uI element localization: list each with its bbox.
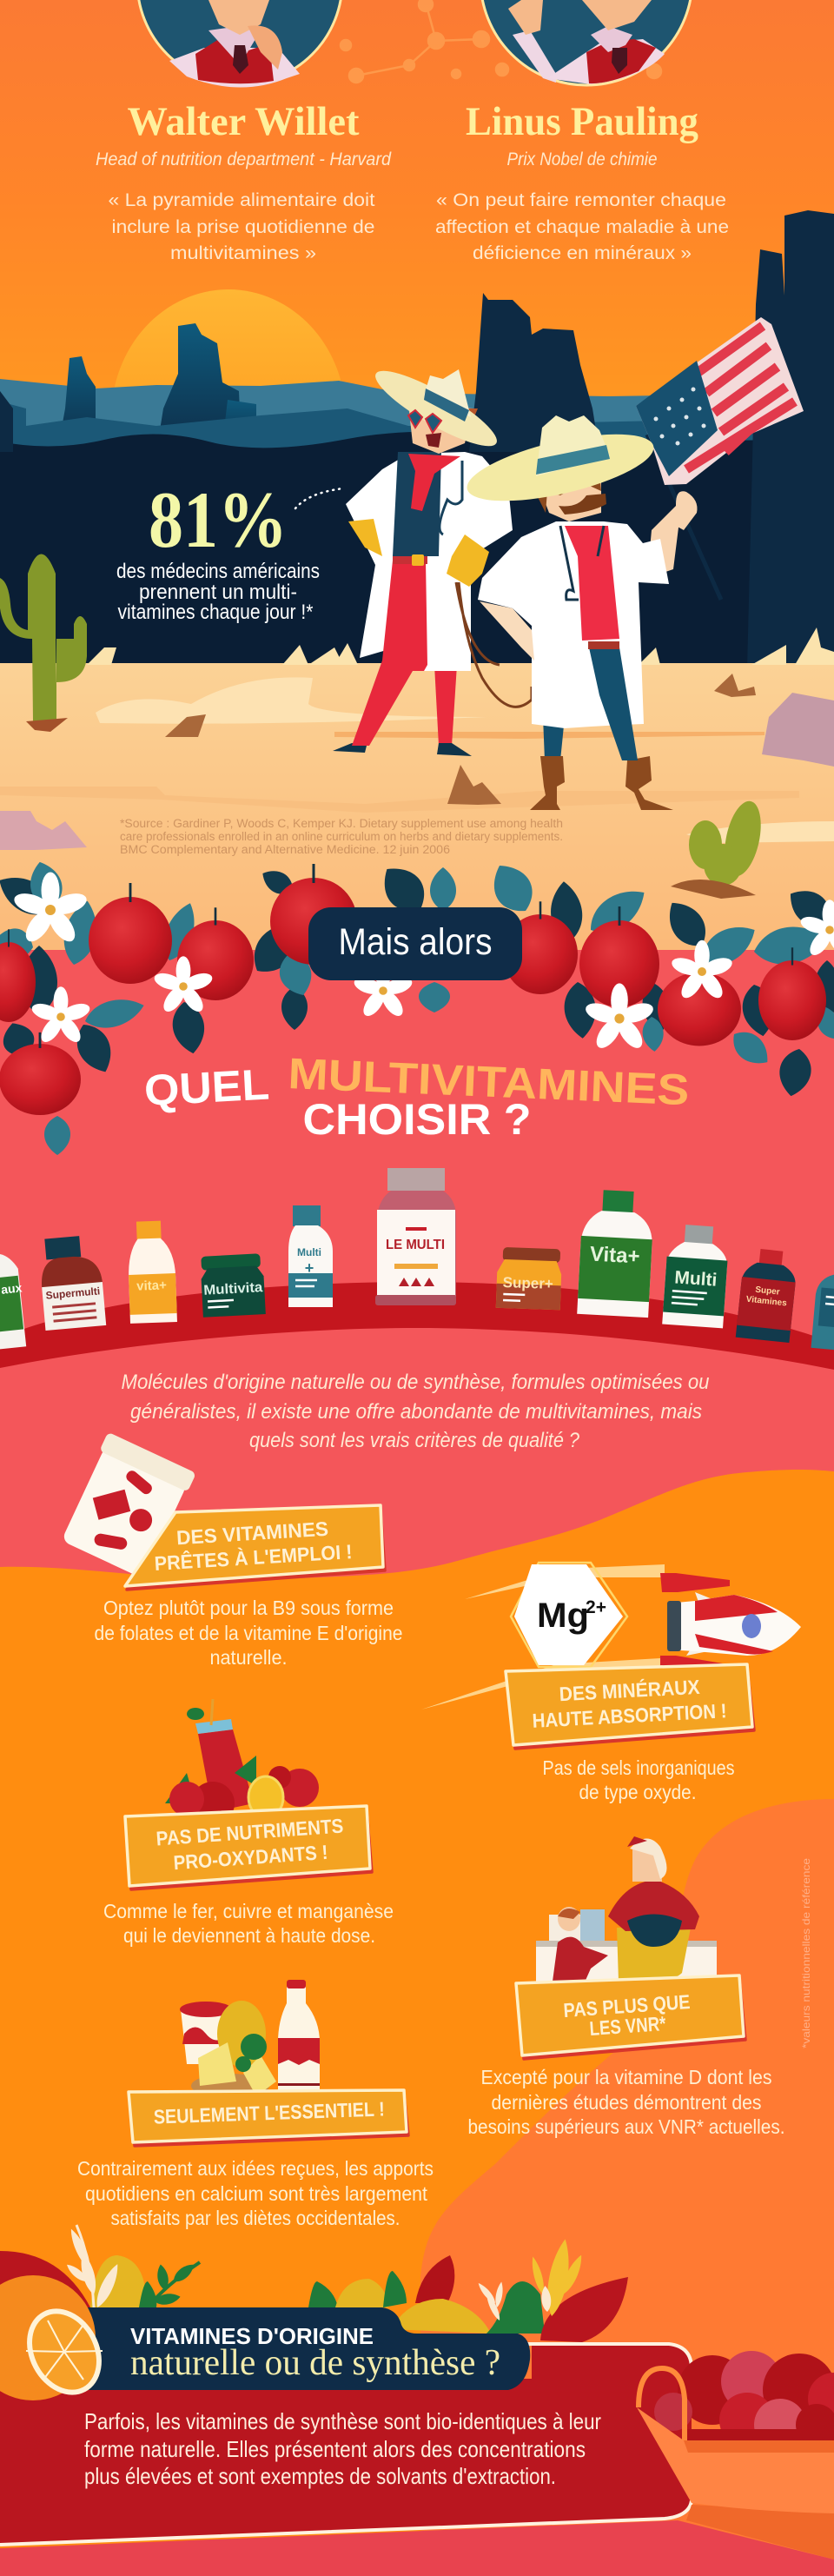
source note: *Source : Gardiner P, Woods C, Kemper KJ. Dietary supplement use among health: [120, 817, 563, 830]
icon: Mg hexagon: [511, 1563, 627, 1667]
criterion 3: no pro-oxidants: [103, 1699, 394, 1947]
bottle: Multi+: +: [305, 1259, 314, 1277]
scenery: grass tufts: [87, 627, 834, 665]
apples: [0, 864, 826, 1115]
bottle: vita+ yellow: vita+: [136, 1278, 167, 1294]
shelf: [0, 1282, 834, 1370]
quote: affection et chaque maladie à une: [435, 217, 729, 237]
text: [467, 2066, 785, 2138]
text: dernières études démontrent des: [492, 2091, 761, 2114]
intro text: généralistes, il existe une offre abondante de multivitamines, mais: [130, 1400, 702, 1424]
title: Quel multivitamines choisir: CHOISIR ?: [302, 1095, 532, 1144]
criterion 2: high-absorption minerals: [421, 1563, 801, 1803]
icon: cactus left: [0, 554, 87, 732]
pill: Mais alors: [308, 907, 522, 980]
card: [506, 1664, 754, 1749]
heading: Linus Pauling: Linus Pauling: [466, 99, 698, 144]
text: Pas de sels inorganiques: [542, 1756, 735, 1779]
card: DES MINÉRAUX: [559, 1675, 701, 1705]
bottle: Multivita: Multivita: [203, 1280, 263, 1298]
leaves: [0, 858, 834, 1099]
icon: heart sunglasses: [408, 410, 441, 433]
text: Comme le fer, cuivre et manganèse: [103, 1900, 394, 1922]
bottle: Multi: Multi: [674, 1267, 718, 1291]
panel body text: plus élevées et sont exemptes de solvants d'extraction.: [84, 2463, 556, 2489]
criterion 4: no more than NRVs: [467, 1836, 785, 2138]
text: de type oxyde.: [579, 1781, 697, 1803]
title: Quel multivitamines choisir: QUEL: [143, 1060, 270, 1115]
panel: natural or synthetic: [0, 2344, 692, 2545]
bottle: LE MULTI: LE MULTI: [386, 1238, 445, 1252]
text: [103, 1900, 394, 1947]
intro text: Molécules d'origine naturelle ou de synthèse, formules optimisées ou: [122, 1371, 709, 1394]
card: HAUTE ABSORPTION !: [532, 1699, 727, 1732]
card: [125, 1505, 385, 1590]
stat description: vitamines chaque jour !*: [118, 601, 313, 624]
bottle: right cut: [811, 1272, 834, 1351]
source note: care professionals enrolled in an online curriculum on herbs and dietary supplements.: [120, 830, 563, 843]
icon: dairy products: [180, 1980, 320, 2098]
icon: rocket: [660, 1573, 801, 1670]
flowers: [11, 873, 834, 1052]
background: coral section: [0, 950, 834, 1651]
scenery: desert ground: [0, 663, 834, 959]
bottle: Super+: [496, 1247, 562, 1310]
bottle: Multi+: [288, 1205, 333, 1307]
illustration: American flag: [636, 317, 804, 600]
heading: Linus Pauling: [435, 99, 729, 263]
banner: heading: VITAMINES D'ORIGINE: [130, 2323, 374, 2349]
text: Excepté pour la vitamine D dont les: [481, 2066, 771, 2088]
icon: apple basket: [637, 2351, 834, 2513]
scenery: blue rocks: [57, 323, 256, 452]
portrait: Walter Willet: [137, 0, 342, 88]
icon: capsule jar: [58, 1432, 196, 1580]
role: Prix Nobel de chimie: [507, 149, 657, 169]
criterion 1: ready-to-use vitamins: [58, 1432, 402, 1669]
bottle: vita+ yellow: [127, 1220, 177, 1324]
decoration: molecule: [341, 0, 661, 83]
bottle: LE MULTI: [375, 1168, 456, 1305]
panel body text: Parfois, les vitamines de synthèse sont bio-identiques à leur: [84, 2408, 601, 2434]
title: Quel multivitamines choisir: [143, 1049, 690, 1144]
card: PRÊTES À L'EMPLOI !: [154, 1539, 353, 1575]
bottle: Supermulti: Supermulti: [45, 1285, 101, 1302]
card: PAS DE NUTRIMENTS: [156, 1815, 344, 1850]
card: [129, 2090, 408, 2146]
icon: orange: [0, 2275, 116, 2408]
intro text: quels sont les vrais critères de qualité ?: [249, 1429, 580, 1452]
text: [77, 2157, 434, 2229]
bottle: Super+: Super+: [502, 1274, 553, 1292]
quote: « La pyramide alimentaire doit: [108, 190, 375, 210]
illustration: doctor cowboy right: [461, 415, 697, 810]
stat description: des médecins américains: [116, 560, 320, 583]
text: [94, 1597, 403, 1669]
stat description: prennent un multi-: [139, 581, 297, 604]
heading: Walter Willet: [96, 99, 392, 263]
product bottles: [0, 1168, 834, 1351]
text: Contrairement aux idées reçues, les apports: [77, 2157, 434, 2180]
card: SEULEMENT L'ESSENTIEL !: [153, 2097, 385, 2128]
quote: « On peut faire remonter chaque: [436, 190, 726, 210]
apple branches: [0, 857, 834, 1155]
bottle: aux: aux: [0, 1280, 23, 1297]
sun: [111, 289, 346, 417]
source note: BMC Complementary and Alternative Medicine. 12 juin 2006: [120, 843, 450, 856]
portrait: Linus Pauling: [480, 0, 692, 85]
panel body text: forme naturelle. Elles présentent alors des concentrations: [84, 2436, 586, 2462]
card: [125, 1806, 372, 1889]
stat description: [116, 560, 320, 624]
bottle: Vita+: [577, 1189, 655, 1318]
icon: speed trails: [421, 1564, 665, 1710]
bottle: Super Vitamines: [736, 1247, 798, 1343]
title: Quel multivitamines choisir: MULTIVITAMINES: [288, 1049, 690, 1114]
quote: [108, 190, 375, 263]
bottle: aux: [0, 1251, 29, 1351]
bottle: Multi: [662, 1224, 730, 1328]
text: satisfaits par les diètes occidentales.: [111, 2207, 400, 2229]
card: DES VITAMINES: [175, 1517, 329, 1549]
illustration: doctor cowboy left: [333, 360, 532, 756]
text: Optez plutôt pour la B9 sous forme: [103, 1597, 394, 1619]
bottle: Super Vitamines: Super: [755, 1285, 780, 1298]
icon: rock right: [762, 693, 834, 767]
card: PAS PLUS QUE: [563, 1990, 691, 2022]
icon: rock left: [0, 811, 87, 850]
bottom band: [0, 2520, 834, 2576]
source note: [120, 817, 563, 856]
footnote: vertical text: *valeurs nutritionnelles de référence: [800, 1858, 812, 2048]
quote: [435, 190, 729, 263]
card: PRO-OXYDANTS !: [173, 1841, 328, 1874]
bottle: Vita+: Vita+: [589, 1243, 640, 1268]
background: coral orange blob: [420, 1799, 834, 2576]
text: de folates et de la vitamine E d'origine: [94, 1622, 403, 1644]
quote: multivitamines »: [170, 243, 316, 263]
scenery: dark rocks: [0, 210, 834, 669]
intro text: [122, 1371, 709, 1452]
text: besoins supérieurs aux VNR* actuelles.: [467, 2115, 785, 2138]
quote: déficience en minéraux »: [473, 243, 692, 263]
stat arrow: dotted curve: [295, 488, 343, 508]
scenery: far mountains: [0, 379, 834, 678]
card: LES VNR*: [589, 2012, 666, 2040]
background: orange section: [0, 1470, 834, 2576]
panel body text: [84, 2408, 601, 2489]
criterion 5: only the essentials: [77, 1980, 434, 2229]
text: qui le deviennent à haute dose.: [123, 1924, 375, 1947]
quote: inclure la prise quotidienne de: [111, 217, 375, 237]
foliage behind banner: [0, 2225, 628, 2342]
banner: heading: [78, 2307, 530, 2390]
icon: smoothie and fruit: [165, 1699, 319, 1825]
card: [516, 1975, 745, 2059]
scenery: sand patches: [0, 677, 834, 843]
bottle: Super Vitamines: Vitamines: [745, 1295, 788, 1309]
icon: Mg hexagon: Mg: [537, 1597, 589, 1635]
stat: 81 percent: [116, 475, 343, 624]
bottle: Multivita: [200, 1253, 266, 1318]
stat: 81 percent: 81%: [149, 475, 288, 564]
role: Head of nutrition department - Harvard: [96, 149, 392, 169]
icon: mother and child cooking: [536, 1836, 717, 1984]
scenery: mid range: [0, 402, 834, 678]
background: sunset sky: [0, 0, 834, 669]
bottle: Supermulti: [37, 1234, 106, 1331]
icon: Mg hexagon: 2+: [586, 1597, 606, 1617]
basket shadow: [686, 2505, 834, 2559]
icon: cactus right: [671, 798, 767, 899]
icon: brown plants: [165, 674, 756, 805]
text: [542, 1756, 735, 1803]
heading: Walter Willet: Walter Willet: [127, 99, 360, 144]
banner: heading: naturelle ou de synthèse ?: [130, 2343, 500, 2383]
text: naturelle.: [210, 1646, 287, 1669]
pill: Mais alors: Mais alors: [339, 921, 492, 963]
text: quotidiens en calcium sont très largement: [85, 2182, 428, 2205]
bottle: Multi+: Multi: [297, 1246, 321, 1258]
